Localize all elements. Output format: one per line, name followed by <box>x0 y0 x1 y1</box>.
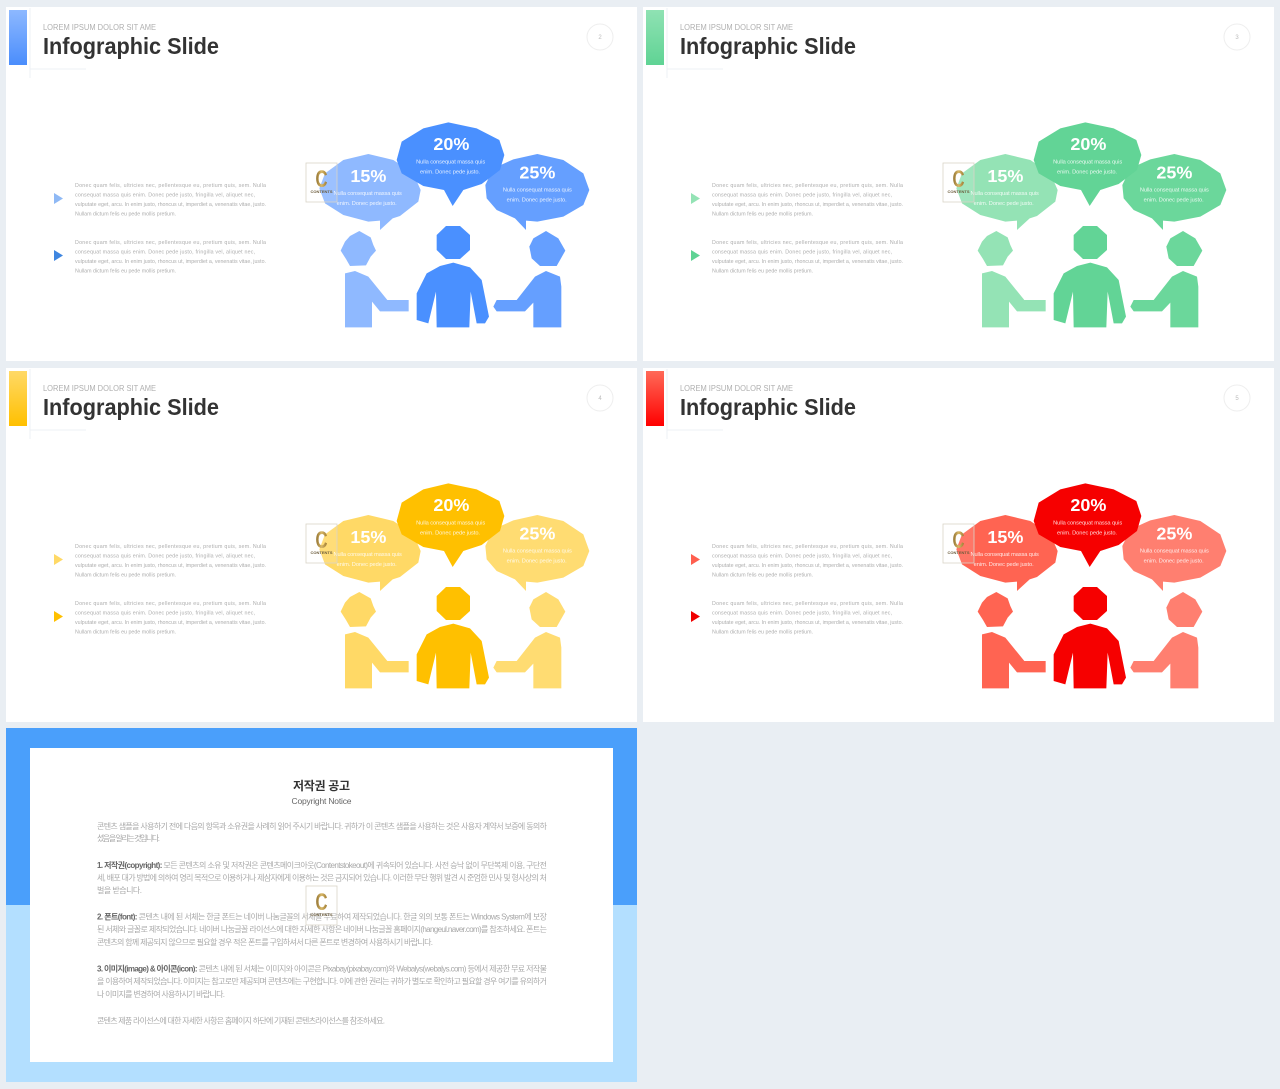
icon: arrow 2 <box>691 250 700 261</box>
text block 2 <box>712 240 903 275</box>
speech bubble 20%: Nulla consequat massa quis <box>416 520 485 526</box>
text block 2 <box>712 601 903 636</box>
speech bubble 15%: enim. Donec pede justo. <box>974 562 1034 568</box>
eyebrow: LOREM IPSUM DOLOR SIT AME <box>43 384 156 393</box>
clause 1: copyright: 세, 배포 대가 방법에 의하여 영리 목적으로 이용하거나 제삼자에게 이용하는 것은 금지되어 있습니다. 이러한 무단 행위 발견 시 준엄한 민사 및 형사상의 처 <box>97 872 547 882</box>
speech bubble 25%: enim. Donec pede justo. <box>507 559 567 565</box>
panel: green slide <box>643 7 1274 361</box>
figure left <box>341 231 409 327</box>
text block 1: Donec quam felis, ultricies nec, pellentesque eu, pretium quis, sem. Nulla <box>75 544 266 550</box>
speech bubble 20%: Nulla consequat massa quis <box>1053 520 1122 526</box>
text block 2: Donec quam felis, ultricies nec, pellentesque eu, pretium quis, sem. Nulla <box>712 240 903 246</box>
heading: 저작권 공고 <box>293 778 350 793</box>
speech bubble 15%: Nulla consequat massa quis <box>970 552 1039 558</box>
page number: 2 <box>598 35 602 41</box>
text block 1: Donec quam felis, ultricies nec, pellentesque eu, pretium quis, sem. Nulla <box>712 544 903 550</box>
text block 1 <box>712 544 903 579</box>
panel: copyright notice <box>6 728 637 1082</box>
chart: people with speech bubbles <box>319 483 589 688</box>
speech bubble 20%: 20% <box>1070 495 1106 515</box>
speech bubble 15% <box>956 515 1058 591</box>
page number: 3 <box>1235 35 1239 41</box>
eyebrow: LOREM IPSUM DOLOR SIT AME <box>680 384 793 393</box>
text block 1: consequat massa quis enim. Donec pede justo, fringilla vel, aliquet nec, <box>712 553 892 559</box>
speech bubble 15%: 15% <box>987 166 1023 186</box>
watermark logo: CONTENTS <box>310 189 333 194</box>
watermark logo: C <box>952 166 964 193</box>
speech bubble 20%: enim. Donec pede justo. <box>420 169 480 175</box>
speech bubble 25%: Nulla consequat massa quis <box>1140 549 1209 555</box>
title: Infographic Slide <box>680 394 856 420</box>
speech bubble 15% <box>319 154 421 230</box>
speech bubble 20% <box>397 483 504 567</box>
speech bubble 25%: 25% <box>1156 524 1192 544</box>
accent bar <box>9 10 27 65</box>
watermark logo: C <box>316 889 328 916</box>
title: Infographic Slide <box>680 33 856 59</box>
icon: arrow 1 <box>54 193 63 204</box>
speech bubble 25% <box>1122 154 1226 230</box>
chart: people with speech bubbles <box>956 122 1226 327</box>
text block 1: vulputate eget, arcu. In enim justo, rhoncus ut, imperdiet a, venenatis vitae, justo. <box>75 202 266 208</box>
speech bubble 20%: enim. Donec pede justo. <box>1057 530 1117 536</box>
speech bubble 15%: 15% <box>987 527 1023 547</box>
page number <box>1224 24 1250 50</box>
subheading: Copyright Notice <box>292 796 352 806</box>
figure right <box>493 231 565 327</box>
text block 1 <box>75 544 266 579</box>
speech bubble 25%: 25% <box>519 524 555 544</box>
text block 2: consequat massa quis enim. Donec pede justo, fringilla vel, aliquet nec, <box>75 249 255 255</box>
accent bar <box>646 10 664 65</box>
text block 2: Nullam dictum felis eu pede mollis pretium. <box>712 269 813 275</box>
watermark logo <box>943 163 974 202</box>
clause 3: image and icon <box>97 964 547 999</box>
speech bubble 25%: 25% <box>1156 163 1192 183</box>
title: Infographic Slide <box>43 33 219 59</box>
chart: people with speech bubbles <box>319 122 589 327</box>
text block 1 <box>75 183 266 218</box>
clause 2: font <box>97 912 548 947</box>
speech bubble 25%: Nulla consequat massa quis <box>503 188 572 194</box>
speech bubble 25%: Nulla consequat massa quis <box>503 549 572 555</box>
clause 2: font: 2. 폰트(font): 콘텐츠 내에 된 서체는 한글 폰트는 네이버 나눔글꼴의 서체를 무료하여 제작되었습니다. 한글 외의 보통 폰트는 Windows System에 보장 <box>97 912 548 922</box>
watermark logo <box>306 886 337 925</box>
speech bubble 20% <box>1034 483 1141 567</box>
clause 3: image and icon: 나 이미지를 변경하여 사용하시기 바랍니다. <box>97 989 225 999</box>
page number <box>587 24 613 50</box>
text block 1: Nullam dictum felis eu pede mollis pretium. <box>75 212 176 218</box>
speech bubble 20%: 20% <box>433 134 469 154</box>
clause 1: copyright: 벌을 받습니다. <box>97 885 142 895</box>
text block 1: Nullam dictum felis eu pede mollis pretium. <box>75 573 176 579</box>
icon: arrow 2 <box>691 611 700 622</box>
accent bar <box>9 371 27 426</box>
speech bubble 15% <box>956 154 1058 230</box>
watermark logo: C <box>316 527 328 554</box>
text block 2: consequat massa quis enim. Donec pede justo, fringilla vel, aliquet nec, <box>712 249 892 255</box>
speech bubble 15%: Nulla consequat massa quis <box>333 552 402 558</box>
text block 1: Nullam dictum felis eu pede mollis pretium. <box>712 212 813 218</box>
speech bubble 15%: enim. Donec pede justo. <box>337 562 397 568</box>
clause 1: copyright: 1. 저작권(copyright): 모든 콘텐츠의 소유 및 저작권은 콘텐츠메이크아웃(Contentstokeout)에 귀속되어 있습니다. 사전 승낙 없이 무단복제 이용, 구단전 <box>97 860 547 870</box>
watermark logo: C <box>952 527 964 554</box>
speech bubble 20%: 20% <box>433 495 469 515</box>
speech bubble 15%: enim. Donec pede justo. <box>974 201 1034 207</box>
speech bubble 20% <box>397 122 504 206</box>
panel: blue slide <box>6 7 637 361</box>
text block 2: Donec quam felis, ultricies nec, pellentesque eu, pretium quis, sem. Nulla <box>712 601 903 607</box>
watermark logo: CONTENTS <box>948 189 970 194</box>
text block 2: vulputate eget, arcu. In enim justo, rhoncus ut, imperdiet a, venenatis vitae, justo. <box>75 620 266 626</box>
speech bubble 20%: Nulla consequat massa quis <box>416 159 485 165</box>
speech bubble 25% <box>485 154 589 230</box>
text block 1: vulputate eget, arcu. In enim justo, rhoncus ut, imperdiet a, venenatis vitae, justo. <box>712 563 903 569</box>
figure right <box>1130 592 1202 688</box>
figure center <box>417 226 489 327</box>
text block 2: Nullam dictum felis eu pede mollis pretium. <box>75 269 176 275</box>
text block 1: consequat massa quis enim. Donec pede justo, fringilla vel, aliquet nec, <box>712 192 892 198</box>
accent bar <box>646 371 664 426</box>
speech bubble 15%: 15% <box>350 166 386 186</box>
figure left <box>978 231 1046 327</box>
speech bubble 20%: enim. Donec pede justo. <box>1057 169 1117 175</box>
text block 2 <box>75 240 266 275</box>
text block 1: Donec quam felis, ultricies nec, pellentesque eu, pretium quis, sem. Nulla <box>75 183 266 189</box>
figure center <box>1054 226 1126 327</box>
speech bubble 25%: Nulla consequat massa quis <box>1140 188 1209 194</box>
text block 2: Nullam dictum felis eu pede mollis pretium. <box>75 630 176 636</box>
speech bubble 15%: Nulla consequat massa quis <box>970 191 1039 197</box>
figure right <box>1130 231 1202 327</box>
page number <box>1224 385 1250 411</box>
notice intro: 콘텐츠 샘플을 사용하기 전에 다음의 항목과 소유권을 사례히 읽어 주시기 바랍니다. 귀하가 이 콘텐츠 샘플을 사용하는 것은 사용자 계약서 보증에 동의하 <box>97 821 548 831</box>
text block 2: Nullam dictum felis eu pede mollis pretium. <box>712 630 813 636</box>
figure left <box>341 592 409 688</box>
text block 1: Donec quam felis, ultricies nec, pellentesque eu, pretium quis, sem. Nulla <box>712 183 903 189</box>
notice intro: 셨음을 알리는 것입니다. <box>97 833 160 843</box>
text block 2: vulputate eget, arcu. In enim justo, rhoncus ut, imperdiet a, venenatis vitae, justo. <box>75 259 266 265</box>
license note: 콘텐츠 제품 라이선스에 대한 자세한 사항은 홈페이지 하단에 기재된 콘텐츠라이선스를 참조하세요. <box>97 1016 385 1026</box>
watermark logo: C <box>316 166 328 193</box>
notice intro <box>97 821 548 843</box>
speech bubble 20% <box>1034 122 1141 206</box>
clause 1: copyright <box>97 860 547 895</box>
watermark logo <box>943 524 974 563</box>
speech bubble 20%: enim. Donec pede justo. <box>420 530 480 536</box>
speech bubble 15% <box>319 515 421 591</box>
watermark logo <box>306 524 337 563</box>
panel: red slide <box>643 368 1274 722</box>
text block 2: vulputate eget, arcu. In enim justo, rhoncus ut, imperdiet a, venenatis vitae, justo. <box>712 620 903 626</box>
icon: arrow 1 <box>54 554 63 565</box>
text block 1: consequat massa quis enim. Donec pede justo, fringilla vel, aliquet nec, <box>75 192 255 198</box>
speech bubble 25%: enim. Donec pede justo. <box>507 198 567 204</box>
watermark logo: CONTENTS <box>948 550 970 555</box>
eyebrow: LOREM IPSUM DOLOR SIT AME <box>43 23 156 32</box>
speech bubble 25% <box>485 515 589 591</box>
text block 1: vulputate eget, arcu. In enim justo, rhoncus ut, imperdiet a, venenatis vitae, justo. <box>75 563 266 569</box>
icon: arrow 2 <box>54 611 63 622</box>
text block 1: vulputate eget, arcu. In enim justo, rhoncus ut, imperdiet a, venenatis vitae, justo. <box>712 202 903 208</box>
clause 3: image and icon: 을 이용하여 제작되었습니다. 이미지는 참고로만 제공되며 콘텐츠에는 구현합니다. 이에 관한 권리는 귀하가 별도로 확인하고 필요할 경우 여기를 유의하거 <box>97 976 547 986</box>
speech bubble 20%: 20% <box>1070 134 1106 154</box>
text block 2: consequat massa quis enim. Donec pede justo, fringilla vel, aliquet nec, <box>75 610 255 616</box>
speech bubble 25%: enim. Donec pede justo. <box>1144 198 1204 204</box>
speech bubble 15%: 15% <box>350 527 386 547</box>
page number: 5 <box>1235 396 1239 402</box>
figure right <box>493 592 565 688</box>
text block 1: Nullam dictum felis eu pede mollis pretium. <box>712 573 813 579</box>
figure center <box>1054 587 1126 688</box>
clause 2: font: 된 서체와 글꼴로 제작되었습니다. 네이버 나눔글꼴 라이선스에 대한 자세한 사항은 네이버 나눔글꼴 홈페이지(hangeul.naver.com)를 참조하세요. 폰트는 <box>97 924 547 934</box>
figure left <box>978 592 1046 688</box>
clause 3: image and icon: 3. 이미지(image) & 아이콘(icon): 콘텐츠 내에 된 서체는 이미지와 아이콘은 Pixabay(pixabay.com)와 Webalys(webalys.com) 등에서 제공한 무료 저작물 <box>97 964 547 974</box>
text block 2: Donec quam felis, ultricies nec, pellentesque eu, pretium quis, sem. Nulla <box>75 601 266 607</box>
text block 2: vulputate eget, arcu. In enim justo, rhoncus ut, imperdiet a, venenatis vitae, justo. <box>712 259 903 265</box>
text block 2: consequat massa quis enim. Donec pede justo, fringilla vel, aliquet nec, <box>712 610 892 616</box>
speech bubble 15%: Nulla consequat massa quis <box>333 191 402 197</box>
text block 2 <box>75 601 266 636</box>
chart: people with speech bubbles <box>956 483 1226 688</box>
speech bubble 20%: Nulla consequat massa quis <box>1053 159 1122 165</box>
speech bubble 15%: enim. Donec pede justo. <box>337 201 397 207</box>
speech bubble 25%: enim. Donec pede justo. <box>1144 559 1204 565</box>
speech bubble 25%: 25% <box>519 163 555 183</box>
watermark logo: CONTENTS <box>310 550 333 555</box>
icon: arrow 1 <box>691 193 700 204</box>
text block 1 <box>712 183 903 218</box>
title: Infographic Slide <box>43 394 219 420</box>
eyebrow: LOREM IPSUM DOLOR SIT AME <box>680 23 793 32</box>
watermark logo <box>306 163 337 202</box>
panel: yellow slide <box>6 368 637 722</box>
text block 2: Donec quam felis, ultricies nec, pellentesque eu, pretium quis, sem. Nulla <box>75 240 266 246</box>
clause 2: font: 콘텐츠의 함께 제공되지 않으므로 필요할 경우 적은 폰트를 구입하셔서 다른 폰트로 변경하여 사용하시기 바랍니다. <box>97 937 433 947</box>
text block 1: consequat massa quis enim. Donec pede justo, fringilla vel, aliquet nec, <box>75 553 255 559</box>
icon: arrow 1 <box>691 554 700 565</box>
icon: arrow 2 <box>54 250 63 261</box>
page number: 4 <box>598 396 602 402</box>
page number <box>587 385 613 411</box>
speech bubble 25% <box>1122 515 1226 591</box>
watermark logo: CONTENTS <box>310 912 333 917</box>
figure center <box>417 587 489 688</box>
